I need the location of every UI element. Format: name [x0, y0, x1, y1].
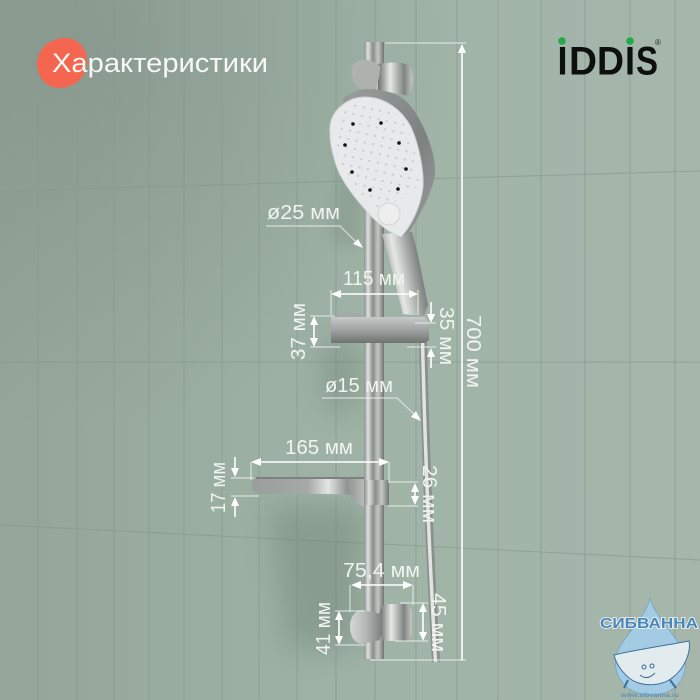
logo: IDDIS	[558, 37, 661, 84]
accent circle	[37, 38, 87, 88]
dimension: 35 мм: 35 мм	[435, 307, 458, 365]
logo wordmark: I	[558, 40, 568, 84]
water drop	[616, 598, 685, 695]
dimension: 41 мм	[312, 602, 365, 655]
dimension: 165 мм: 165 мм	[285, 436, 353, 459]
dimension: 165 мм	[251, 436, 389, 482]
dimension: 115 мм	[331, 267, 418, 315]
dimension: overall height 700 мм	[370, 43, 485, 660]
bottom wall bracket	[350, 604, 412, 644]
shower handle	[382, 232, 428, 316]
top wall bracket	[352, 60, 413, 96]
logo registered mark: ®	[655, 38, 661, 47]
nozzle dots	[334, 101, 419, 212]
head face	[330, 97, 423, 237]
dimension: 37 мм	[287, 303, 340, 360]
dimension: 17 мм	[207, 457, 259, 517]
bathtub	[614, 641, 689, 685]
dimension: ø25 мм: ø25 мм	[267, 201, 340, 224]
dimension: ø15 мм: ø15 мм	[325, 374, 393, 397]
dimension: 45 мм	[395, 593, 450, 652]
watermark: Сибванна	[600, 598, 699, 699]
tub feet	[624, 680, 676, 688]
logo wordmark: I	[625, 40, 635, 84]
tub face	[640, 664, 655, 678]
watermark url: www.sibvanna.ru	[620, 692, 679, 699]
dimension: 115 мм: 115 мм	[343, 267, 405, 290]
dimension: 41 мм: 41 мм	[312, 602, 335, 655]
hose	[422, 340, 436, 662]
dimension: ø15 мм	[322, 374, 421, 421]
dimension: overall height 700 мм: 700 мм	[462, 315, 485, 388]
shower head	[330, 89, 435, 238]
dimension: 35 мм	[407, 302, 458, 368]
heading text: Характеристики	[52, 48, 268, 78]
dimension: 45 мм: 45 мм	[427, 593, 450, 652]
head shell	[340, 89, 435, 238]
heading: Характеристики	[37, 38, 268, 88]
black nozzles	[343, 121, 408, 192]
soap dish collar	[364, 480, 389, 505]
dimension: 75,4 мм: 75,4 мм	[343, 559, 420, 582]
dimension: 37 мм: 37 мм	[287, 303, 310, 360]
button	[378, 203, 400, 225]
dimension: 17 мм: 17 мм	[207, 462, 230, 513]
logo wordmark: D	[569, 40, 597, 84]
dimension: ø25 мм	[266, 201, 363, 248]
dimension: 26 мм	[388, 465, 441, 523]
soap dish	[252, 477, 389, 507]
logo wordmark: D	[597, 40, 624, 84]
logo wordmark: S	[636, 40, 658, 84]
shower rail	[364, 42, 436, 662]
watermark text: СИБВАННА	[600, 616, 699, 632]
dimension: 75,4 мм	[343, 559, 420, 612]
dimension: 26 мм: 26 мм	[418, 465, 441, 523]
rod	[364, 42, 384, 659]
logo dots	[558, 37, 634, 45]
logo wordmark	[558, 40, 658, 84]
slider holder	[331, 313, 429, 343]
